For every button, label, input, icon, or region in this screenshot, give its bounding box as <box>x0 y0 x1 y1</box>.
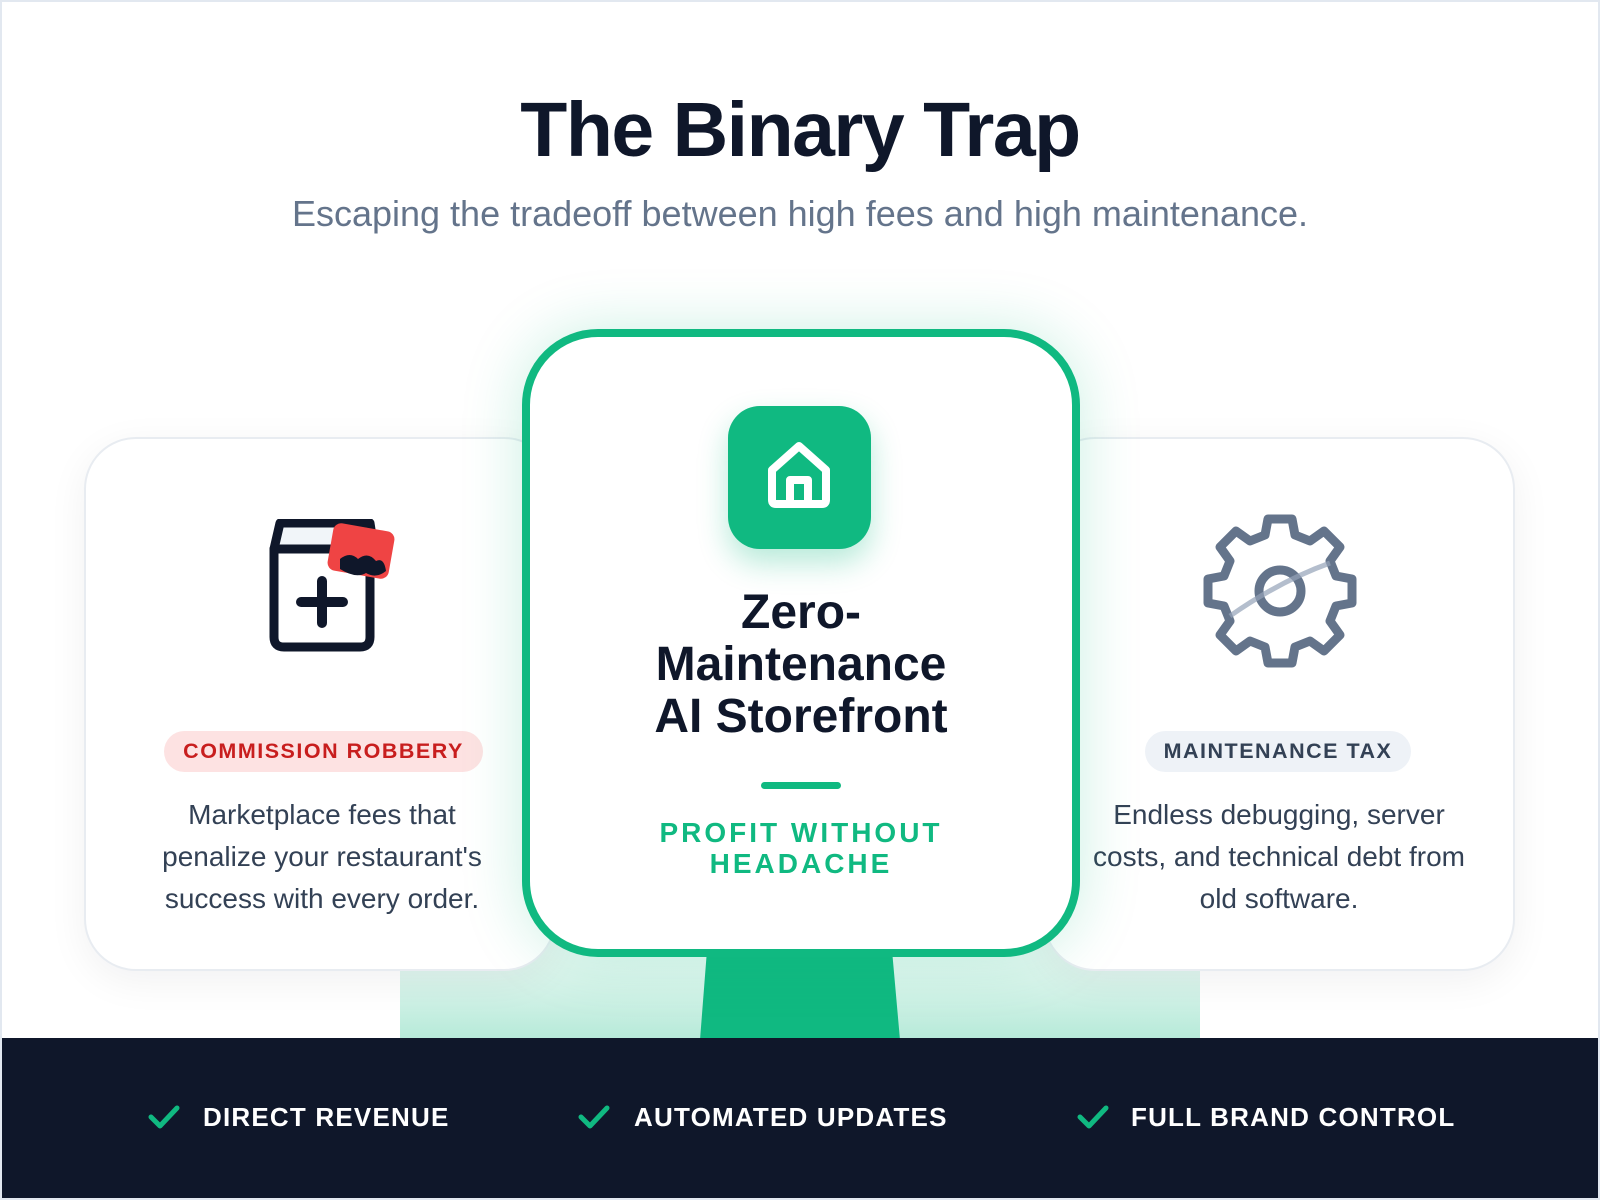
text: description: penalize your restaurant's <box>162 841 482 872</box>
text: description <box>1093 799 1465 914</box>
text: description: costs, and technical debt from <box>1093 841 1465 872</box>
heading: Zero- <box>741 586 861 639</box>
tagline: HEADACHE <box>710 848 892 879</box>
heading: AI Storefront <box>654 690 948 743</box>
pill: maintenance tax: MAINTENANCE TAX <box>1164 739 1392 763</box>
text: description: success with every order. <box>165 883 479 914</box>
pill: commission robbery: COMMISSION ROBBERY <box>183 739 464 763</box>
item: direct revenue: DIRECT REVENUE <box>203 1102 450 1132</box>
text: description: Marketplace fees that <box>188 799 456 830</box>
text: description <box>162 799 482 914</box>
glow behind stem <box>400 940 1200 1038</box>
text: description: Endless debugging, server <box>1113 799 1445 830</box>
icon: receipt box <box>270 519 394 652</box>
heading: Maintenance <box>656 638 946 691</box>
subtitle: Escaping the tradeoff between high fees and high maintenance. <box>292 193 1308 234</box>
divider bar <box>761 782 841 789</box>
title: The Binary Trap <box>520 87 1080 173</box>
heading <box>654 586 948 743</box>
footer bar <box>2 1038 1598 1198</box>
pill: commission robbery <box>164 731 483 772</box>
tagline: PROFIT WITHOUT <box>659 817 943 848</box>
item: automated updates: AUTOMATED UPDATES <box>634 1102 948 1132</box>
tagline <box>659 817 943 879</box>
stem <box>700 957 900 1038</box>
pill: maintenance tax <box>1145 731 1411 772</box>
text: description: old software. <box>1200 883 1358 914</box>
panel: commission robbery <box>84 437 556 971</box>
icon: home tile <box>728 406 871 549</box>
panel: maintenance tax <box>1043 437 1515 971</box>
icon: gear <box>1204 514 1356 668</box>
panel: center card <box>522 329 1080 957</box>
item: full brand control: FULL BRAND CONTROL <box>1131 1102 1455 1132</box>
